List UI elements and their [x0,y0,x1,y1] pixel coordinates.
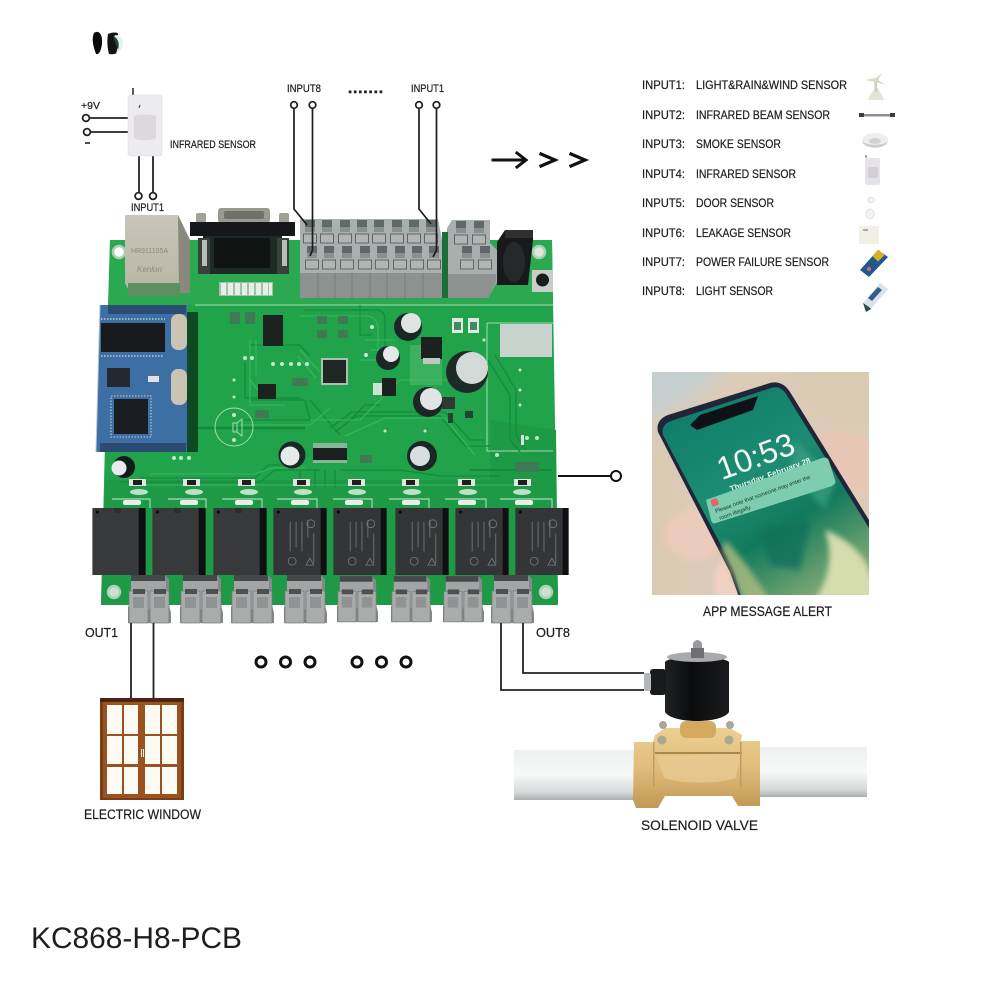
neck [680,721,716,738]
diodes and relay footprints [112,479,552,508]
small components [230,312,539,472]
ethernet port [125,215,190,296]
label: out1: OUT1 [85,625,118,640]
chip: main MCU [321,358,348,385]
sensor list text rows: POWER FAILURE SENSOR [696,255,829,269]
omitted outputs circles [256,657,411,667]
label: infrared sensor: INFRARED SENSOR [170,139,256,151]
label: plus 9V: +9V [81,100,100,112]
DC power jack [497,230,533,285]
mounting holes [108,246,552,598]
sensor list text rows: SMOKE SENSOR [696,137,781,151]
board base [101,240,558,605]
label: electric window: ELECTRIC WINDOW [84,807,201,822]
sensor list text rows: INFRARED BEAM SENSOR [696,108,830,122]
sensor list text rows: INPUT3: [642,137,685,151]
label: input1: INPUT1 [411,83,444,95]
icon: light sensor [863,283,888,312]
sensor list text rows: LIGHT SENSOR [696,284,773,298]
chip: small regulator [373,378,396,396]
sensor list text rows: INPUT4: [642,167,685,181]
relay bank [92,508,569,575]
notification text: Please note that someone may enter the [715,475,811,515]
title: product model: KC868-H8-PCB [31,922,242,955]
capacitors [112,313,488,478]
label: input8: INPUT8 [287,83,321,95]
push button [532,270,553,292]
sensor list text rows: LIGHT&RAIN&WIND SENSOR [696,78,847,92]
lock screen date: Thursday, February 28 [729,456,812,494]
sensor list text rows: INPUT8: [642,284,685,298]
out labels and wires [85,623,644,698]
icon: smoke sensor [862,133,888,148]
connector to phone [558,471,621,481]
sensor list [642,73,895,312]
sensor list text rows: LEAKAGE SENSOR [696,226,791,240]
hand [665,431,880,614]
input wiring header [287,80,444,97]
coil [665,657,729,721]
DB9 serial connector [190,208,295,274]
sensor list text rows: INPUT1: [642,78,685,92]
phone photo: app alert: room illegally. [719,505,753,522]
icon: power failure sensor [860,250,888,277]
chip: small IC [258,384,276,399]
chip: relay driver [313,443,347,463]
light copper traces [130,316,520,485]
notification banner [706,458,835,523]
via pads grid [410,345,442,385]
sensor list text rows: INPUT2: [642,108,685,122]
ethernet port: Kenlon [137,265,162,274]
dark copper traces [120,305,552,488]
stem [691,648,704,658]
icon: PIR sensor [865,155,880,185]
bolts [658,721,734,744]
photo background [652,372,869,595]
sensor list text rows: DOOR SENSOR [696,196,774,210]
input terminal block [300,219,444,298]
ethernet port: HR911105A [131,248,168,255]
icon: door sensor [866,197,874,219]
icon: infrared sensor [128,95,162,156]
ellipsis dots: ....... [348,80,383,97]
top left image fragment [93,32,123,54]
label: input1 left: INPUT1 [131,202,164,214]
sensor list text rows: INPUT6: [642,226,685,240]
phone photo: app alert [652,372,869,595]
phone body [657,382,869,600]
via dots [172,325,539,460]
lock screen time: 10:53 [712,426,799,487]
sensor list text rows: INPUT7: [642,255,685,269]
label: solenoid valve: SOLENOID VALVE [641,817,758,833]
wires [131,623,644,698]
icon: leakage sensor [859,226,879,244]
arrows [493,153,585,167]
chip: top logic IC [263,315,283,346]
gray label patch [500,324,552,357]
sensor list text rows: INPUT5: [642,196,685,210]
input wires into terminal block [291,102,440,257]
electric window [100,698,184,800]
notch [690,396,758,430]
wiring: power terminals [83,88,156,199]
sensor list text rows: INFRARED SENSOR [696,167,796,181]
DIP switch row [219,282,273,296]
chip: regulator [421,337,442,364]
silkscreen lines [195,305,553,451]
PCB board [92,208,569,623]
sea texture [722,440,875,600]
speaker outline [215,408,253,446]
label: out8: OUT8 [536,625,570,640]
infrared sensor wiring diagram [81,88,256,214]
icon: infrared beam sensor [859,113,895,117]
solenoid valve [514,640,867,808]
blue network module [96,305,198,452]
output terminals [128,575,534,623]
icon: wind sensor [865,73,886,100]
pipes [514,750,634,800]
sensor list text rows [642,78,847,298]
label: app message alert: APP MESSAGE ALERT [703,604,832,619]
brass body [633,728,760,808]
notification icon [710,498,719,507]
power terminal block [442,220,497,298]
